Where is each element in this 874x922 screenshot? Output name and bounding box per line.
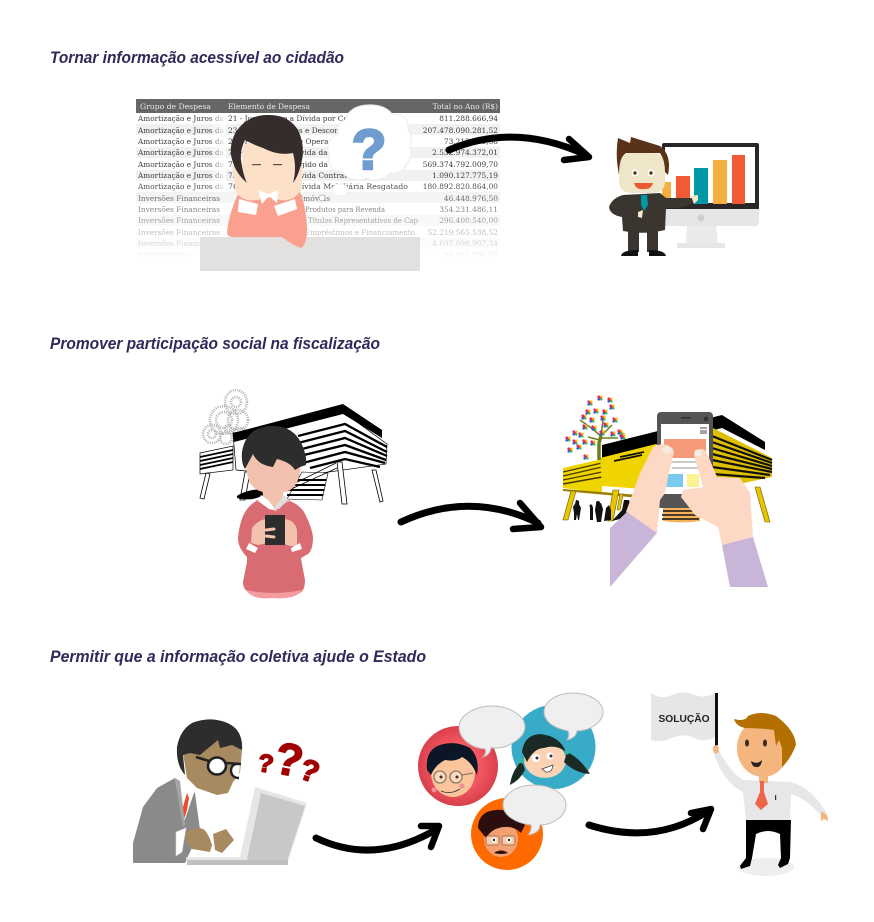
data table: 180.892.820.864,00 — [423, 182, 498, 191]
data table: Imóveis — [300, 194, 330, 203]
data table: Amortização e Juros da — [137, 114, 225, 123]
data table: Amortização e Juros da — [137, 148, 225, 157]
data table: 569.374.792.009,70 — [423, 160, 498, 169]
avatar: man with moustache in orange circle — [471, 798, 543, 870]
icon: red question marks: ? — [295, 753, 324, 790]
data table: Inversões Financeiras — [138, 194, 220, 203]
data table: 71 - Principal da Dívida da União — [228, 148, 353, 157]
icon: hands holding smartphone — [610, 412, 768, 587]
data table: 52.219.565.538,52 — [427, 228, 498, 237]
data table: Títulos Representativos de Cap — [308, 216, 418, 225]
icon: man raising solution flag — [651, 692, 828, 876]
data table: Amortização e Juros da — [137, 160, 225, 169]
icon: colourful tree — [565, 395, 626, 460]
data table: 25 - Encargos sobre Operações — [228, 137, 345, 146]
icon: red question marks — [256, 732, 324, 790]
icon: question mark: ? — [352, 118, 386, 182]
people silhouettes — [573, 500, 631, 522]
arrow: table to manager — [449, 137, 589, 160]
icon: red question marks: ? — [256, 749, 276, 779]
data table: 72 - Principal Corrigido da Dívida — [228, 160, 355, 169]
left hand — [626, 444, 674, 533]
phone — [657, 412, 713, 508]
title: section 3: Permitir que a informação coletiva ajude o Estado — [50, 648, 426, 666]
data table: 811.288.666,94 — [439, 114, 498, 123]
data table: Inversões Financeiras — [138, 239, 220, 248]
data table: 2.532.974.372,01 — [432, 148, 498, 157]
right hand — [681, 449, 753, 545]
data table: 23 - Juros, Deságios e Descontos — [228, 126, 351, 135]
icon: woman holding phone — [238, 426, 313, 598]
panel: collective faces — [418, 693, 603, 870]
data table: Amortização e Juros da — [137, 126, 225, 135]
data table: Empréstimos e Financiamento — [305, 228, 416, 237]
data table: 73.212.813,68 — [444, 137, 498, 146]
avatar: girl in blue circle — [510, 705, 596, 789]
data table: 1.090.127.775,19 — [432, 171, 498, 180]
data table: 98.681.986,97 — [444, 250, 498, 259]
arrow: man to collective — [316, 826, 439, 850]
shirt and arms — [713, 749, 826, 820]
manager figure — [609, 137, 698, 256]
data table: 354.231.486,11 — [439, 205, 498, 214]
data table: Total no Ano (R$) — [433, 102, 498, 111]
desk — [200, 237, 420, 271]
trousers — [740, 820, 791, 869]
data table: Produtos para Revenda — [305, 205, 386, 214]
flag: SOLUÇÃO — [658, 712, 710, 725]
data table: Amortização e Juros da — [137, 182, 225, 191]
panel: budget table with confused citizen — [136, 99, 500, 271]
data table: 73 - Principal da Dívida Contratual — [228, 171, 359, 180]
monitor — [662, 143, 759, 248]
avatar: man in red circle — [418, 726, 498, 806]
icon: red question marks: ? — [270, 732, 308, 787]
thought cloud — [319, 105, 412, 201]
flag — [651, 692, 718, 751]
icon: manager presenting chart on monitor — [609, 137, 759, 256]
data table: 21 - Juros sobre a Dívida por Contrato — [228, 114, 372, 123]
icon: man with glasses at laptop — [133, 719, 307, 865]
arrow: citizen to connected building — [401, 503, 541, 529]
icon: coloured building — [563, 415, 772, 522]
title: section 1: Tornar informação acessível ao cidadão — [50, 49, 344, 67]
data table: 207.478.090.281,52 — [423, 126, 498, 135]
data table: 76 - Principal da Dívida Mobiliária Resgatado — [228, 182, 409, 191]
speech bubbles — [459, 693, 603, 835]
arrow: collective to solution — [589, 809, 711, 833]
data table: 296.400.540,00 — [439, 216, 498, 225]
data table: Amortização e Juros da — [137, 171, 225, 180]
data table: Grupo de Despesa — [140, 102, 212, 111]
data table: Amortização e Juros da — [137, 137, 225, 146]
icon: woman resting head on hands — [227, 115, 307, 248]
title: section 2: Promover participação social na fiscalização — [50, 335, 380, 353]
data table: Inversões Financeiras — [138, 205, 220, 214]
data table — [136, 99, 500, 260]
data table: 4.697.098.907,34 — [432, 239, 498, 248]
data table: Elemento de Despesa — [228, 102, 311, 111]
bar chart — [662, 155, 745, 204]
data table: Investimentos — [138, 250, 190, 259]
data table: 46.448.976,50 — [444, 194, 498, 203]
icon: line-art tree — [203, 390, 248, 444]
data table: Inversões Financeiras — [138, 216, 220, 225]
icon: line-art modernist building — [200, 404, 387, 504]
data table: Inversões Financeiras — [138, 228, 220, 237]
